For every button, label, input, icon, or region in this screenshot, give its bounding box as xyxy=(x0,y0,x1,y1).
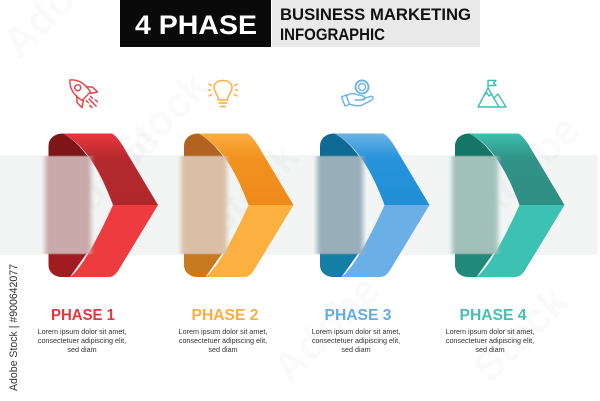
phase 3 text: Lorem ipsum dolor sit amet, xyxy=(312,327,400,336)
subtitle: business marketing infographic xyxy=(272,0,480,47)
stock id: Adobe Stock | #900642077 xyxy=(8,264,20,391)
phase 4 text: sed diam xyxy=(475,345,505,354)
subtitle: business marketing infographic: BUSINESS MARKETING xyxy=(280,6,471,24)
watermark: Adobe xyxy=(463,106,589,231)
watermark: Adobe xyxy=(263,266,389,391)
phase 4 text: Lorem ipsum dolor sit amet, xyxy=(446,327,534,336)
watermark: Stock xyxy=(103,62,218,176)
icon: light bulb xyxy=(208,80,238,106)
background strip xyxy=(0,155,598,255)
phase 2 text xyxy=(179,307,267,354)
frosted overlay 2 xyxy=(181,156,227,254)
chevron 1: red xyxy=(48,134,158,277)
icon: rocket xyxy=(62,72,104,114)
phase 3 text: sed diam xyxy=(341,345,371,354)
frosted overlay 3 xyxy=(317,156,363,254)
watermark: Stock xyxy=(463,277,578,391)
icon: mountain with flag xyxy=(478,80,506,107)
phase 2 text: consectetuer adipiscing elit, xyxy=(179,336,267,345)
phase 4 text: consectetuer adipiscing elit, xyxy=(446,336,534,345)
watermark: Adobe xyxy=(43,116,169,241)
phase 2 text: Lorem ipsum dolor sit amet, xyxy=(179,327,267,336)
title: 4 PHASE xyxy=(120,0,271,47)
phase 1 text: consectetuer adipiscing elit, xyxy=(38,336,126,345)
phase 2 text: sed diam xyxy=(208,345,238,354)
phase 1 text: sed diam xyxy=(67,345,97,354)
chevron 2: orange xyxy=(184,134,294,277)
frosted overlay 4 xyxy=(452,156,498,254)
phase 1 text: Lorem ipsum dolor sit amet, xyxy=(38,327,126,336)
watermark: Stock xyxy=(193,132,308,246)
phase 1 text xyxy=(38,307,126,354)
chevron 3: blue xyxy=(320,134,430,277)
phase 4 text xyxy=(446,307,534,354)
phase 4 text: PHASE 4 xyxy=(460,307,527,324)
frosted overlay 1 xyxy=(45,156,91,254)
phase 3 text: PHASE 3 xyxy=(324,307,392,324)
chevron 4: teal xyxy=(455,134,564,277)
phase 3 text xyxy=(312,307,400,354)
subtitle: business marketing infographic: INFOGRAPHIC xyxy=(280,26,385,44)
phase 2 text: PHASE 2 xyxy=(192,307,258,324)
title: 4 PHASE: 4 PHASE xyxy=(135,10,257,40)
phase 3 text: consectetuer adipiscing elit, xyxy=(312,336,400,345)
phase 1 text: PHASE 1 xyxy=(51,307,115,324)
icon: hand with gear xyxy=(342,80,373,106)
